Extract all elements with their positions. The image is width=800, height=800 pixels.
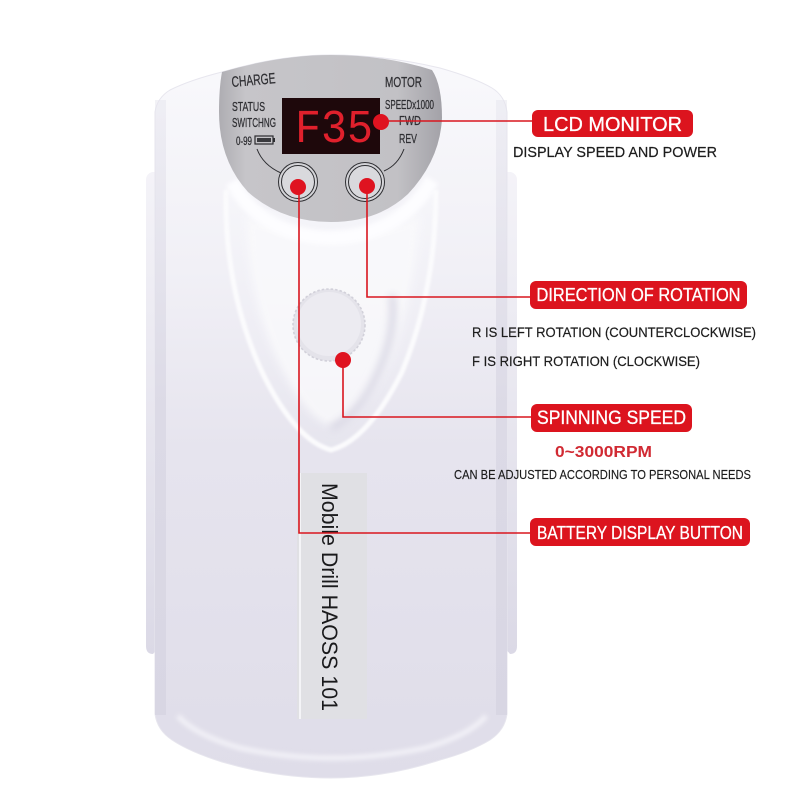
panel labels: SPEEDx1000 <box>385 97 434 112</box>
main shell <box>155 55 507 778</box>
speed knob <box>293 289 365 361</box>
callout: LCD monitor: LCD MONITOR <box>543 114 682 136</box>
model label: Mobile Drill HAOSS 101 <box>317 483 342 711</box>
callout leader: battery display button <box>290 179 531 533</box>
callout: spinning speed: SPINNING SPEED <box>537 408 686 429</box>
panel labels: MOTOR <box>385 74 422 91</box>
callout: spinning speed: CAN BE ADJUSTED ACCORDING TO PERSONAL NEEDS <box>454 468 751 482</box>
callout: direction of rotation: R IS LEFT ROTATION (COUNTERCLOCKWISE) <box>472 324 756 340</box>
callout: LCD monitor: DISPLAY SPEED AND POWER <box>513 144 717 161</box>
shell edge shading <box>155 100 166 715</box>
panel labels: 0-99 <box>236 134 252 148</box>
callout: direction of rotation: DIRECTION OF ROTATION <box>536 285 740 305</box>
side grip left <box>146 172 165 654</box>
panel labels: REV <box>399 131 417 146</box>
callout: direction of rotation: F IS RIGHT ROTATION (CLOCKWISE) <box>472 353 700 369</box>
callout: LCD monitor <box>513 110 717 161</box>
side grip right <box>498 172 517 654</box>
callout leader: LCD monitor <box>373 114 532 130</box>
panel labels: SWITCHNG <box>232 115 276 130</box>
panel labels: FWD <box>399 113 421 128</box>
callout leader: spinning speed <box>335 352 532 417</box>
panel labels <box>231 70 434 148</box>
callout: battery display button <box>530 518 750 546</box>
panel labels: STATUS <box>232 99 265 114</box>
bracket arcs <box>257 149 404 173</box>
callout: battery display button: BATTERY DISPLAY BUTTON <box>537 523 743 543</box>
device body <box>146 55 517 778</box>
panel labels: CHARGE <box>231 70 276 91</box>
battery button <box>278 162 318 202</box>
highlight ring under panel <box>232 180 432 238</box>
central scoop recess <box>226 190 436 450</box>
callout: spinning speed <box>454 404 751 482</box>
callout leader: direction of rotation <box>359 178 531 297</box>
shell bottom rim highlight <box>178 716 486 758</box>
model label <box>297 473 367 719</box>
direction button <box>346 162 384 202</box>
LCD display: F35 <box>295 104 373 157</box>
callout: direction of rotation <box>472 281 756 369</box>
callout: spinning speed: 0~3000RPM <box>555 444 652 461</box>
control panel <box>219 55 442 222</box>
icon: battery <box>255 136 275 144</box>
